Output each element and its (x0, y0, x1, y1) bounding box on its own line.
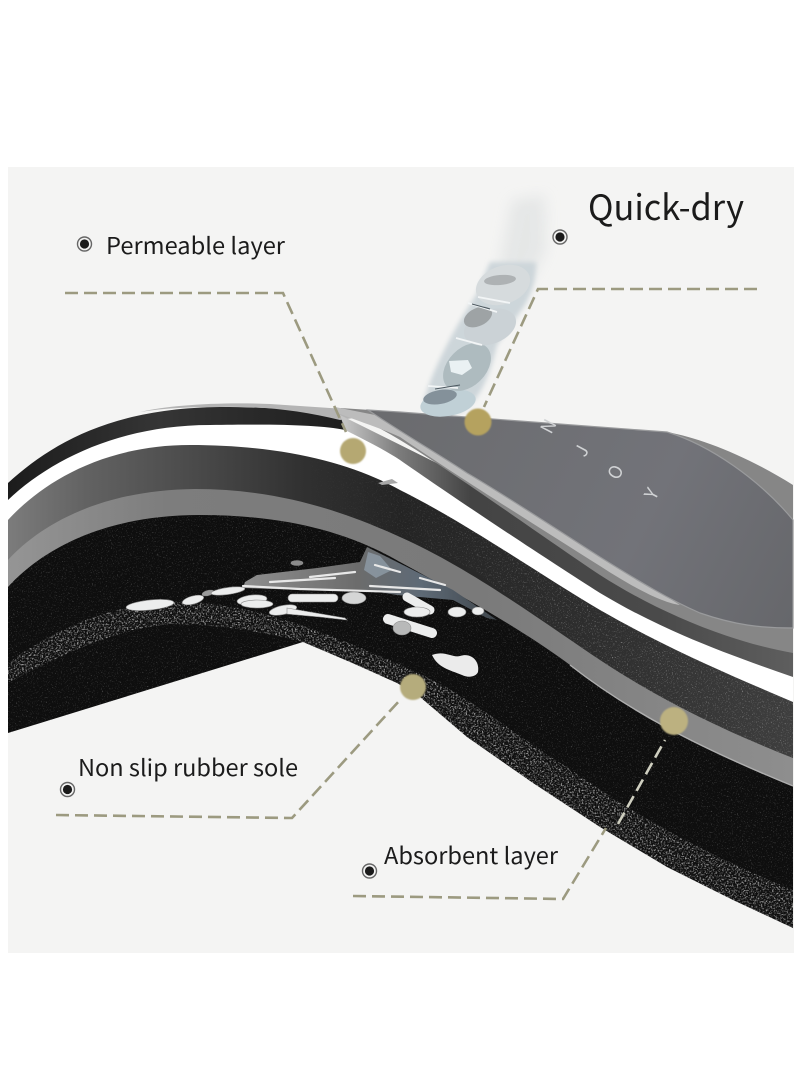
splash highlights (364, 552, 392, 578)
leader line (65, 293, 346, 432)
light rim lip (335, 407, 680, 605)
callout: permeable layer (65, 227, 366, 464)
brand lettering on surface: O (600, 460, 630, 484)
mid grey layer, right part (340, 408, 793, 653)
leader line on background (353, 828, 606, 899)
callout: non slip rubber sole (56, 674, 426, 818)
top black layer, left part (8, 407, 345, 500)
dark fabric weave texture (329, 464, 793, 757)
water stream body (424, 262, 536, 414)
bullet (60, 782, 74, 796)
bullet (362, 864, 376, 878)
light top edge strip (140, 403, 368, 420)
leader line (56, 700, 400, 818)
brand lettering on surface: J (567, 440, 595, 461)
infographic: quick-dry mat layers (8, 167, 794, 953)
label: Non slip rubber sole (78, 749, 298, 783)
callout: absorbent layer (353, 707, 688, 899)
water column pouring down (418, 195, 546, 421)
white layer band (8, 415, 793, 720)
heading: Quick-dry (588, 180, 744, 231)
small highlight notch (378, 479, 398, 485)
label: Absorbent layer (384, 837, 558, 871)
grey cushion layer (8, 489, 793, 800)
dark underside band, right part (340, 415, 793, 677)
splash streaks (243, 565, 445, 592)
heart-shaped water bead (432, 653, 478, 677)
water drops (418, 258, 536, 421)
sole fine texture (8, 515, 794, 930)
leader line over the black sole (618, 740, 665, 824)
brand lettering on surface: N (533, 414, 562, 438)
splash body (243, 547, 497, 620)
bullet (78, 237, 92, 251)
water mist (495, 195, 546, 290)
textured absorbent edge band (8, 600, 794, 930)
black rubber sole (8, 515, 793, 928)
callout: quick-dry (464, 180, 757, 436)
marker dot (340, 438, 366, 464)
label: Permeable layer (106, 227, 285, 261)
leader line (484, 289, 757, 407)
panel: diagram background (8, 167, 794, 953)
mat cross-section (8, 403, 794, 930)
water splash on the sole (126, 547, 497, 677)
brand lettering on surface: Y (637, 483, 665, 505)
grey top surface (368, 410, 793, 628)
marker dot (660, 707, 688, 735)
marker dot (464, 408, 492, 436)
bullet (553, 230, 567, 244)
white water beads (126, 560, 484, 635)
marker dot (400, 674, 426, 700)
light seam on grey layer edge (570, 665, 793, 786)
dark fabric layer (8, 445, 793, 800)
brand lettering on surface (533, 414, 665, 505)
